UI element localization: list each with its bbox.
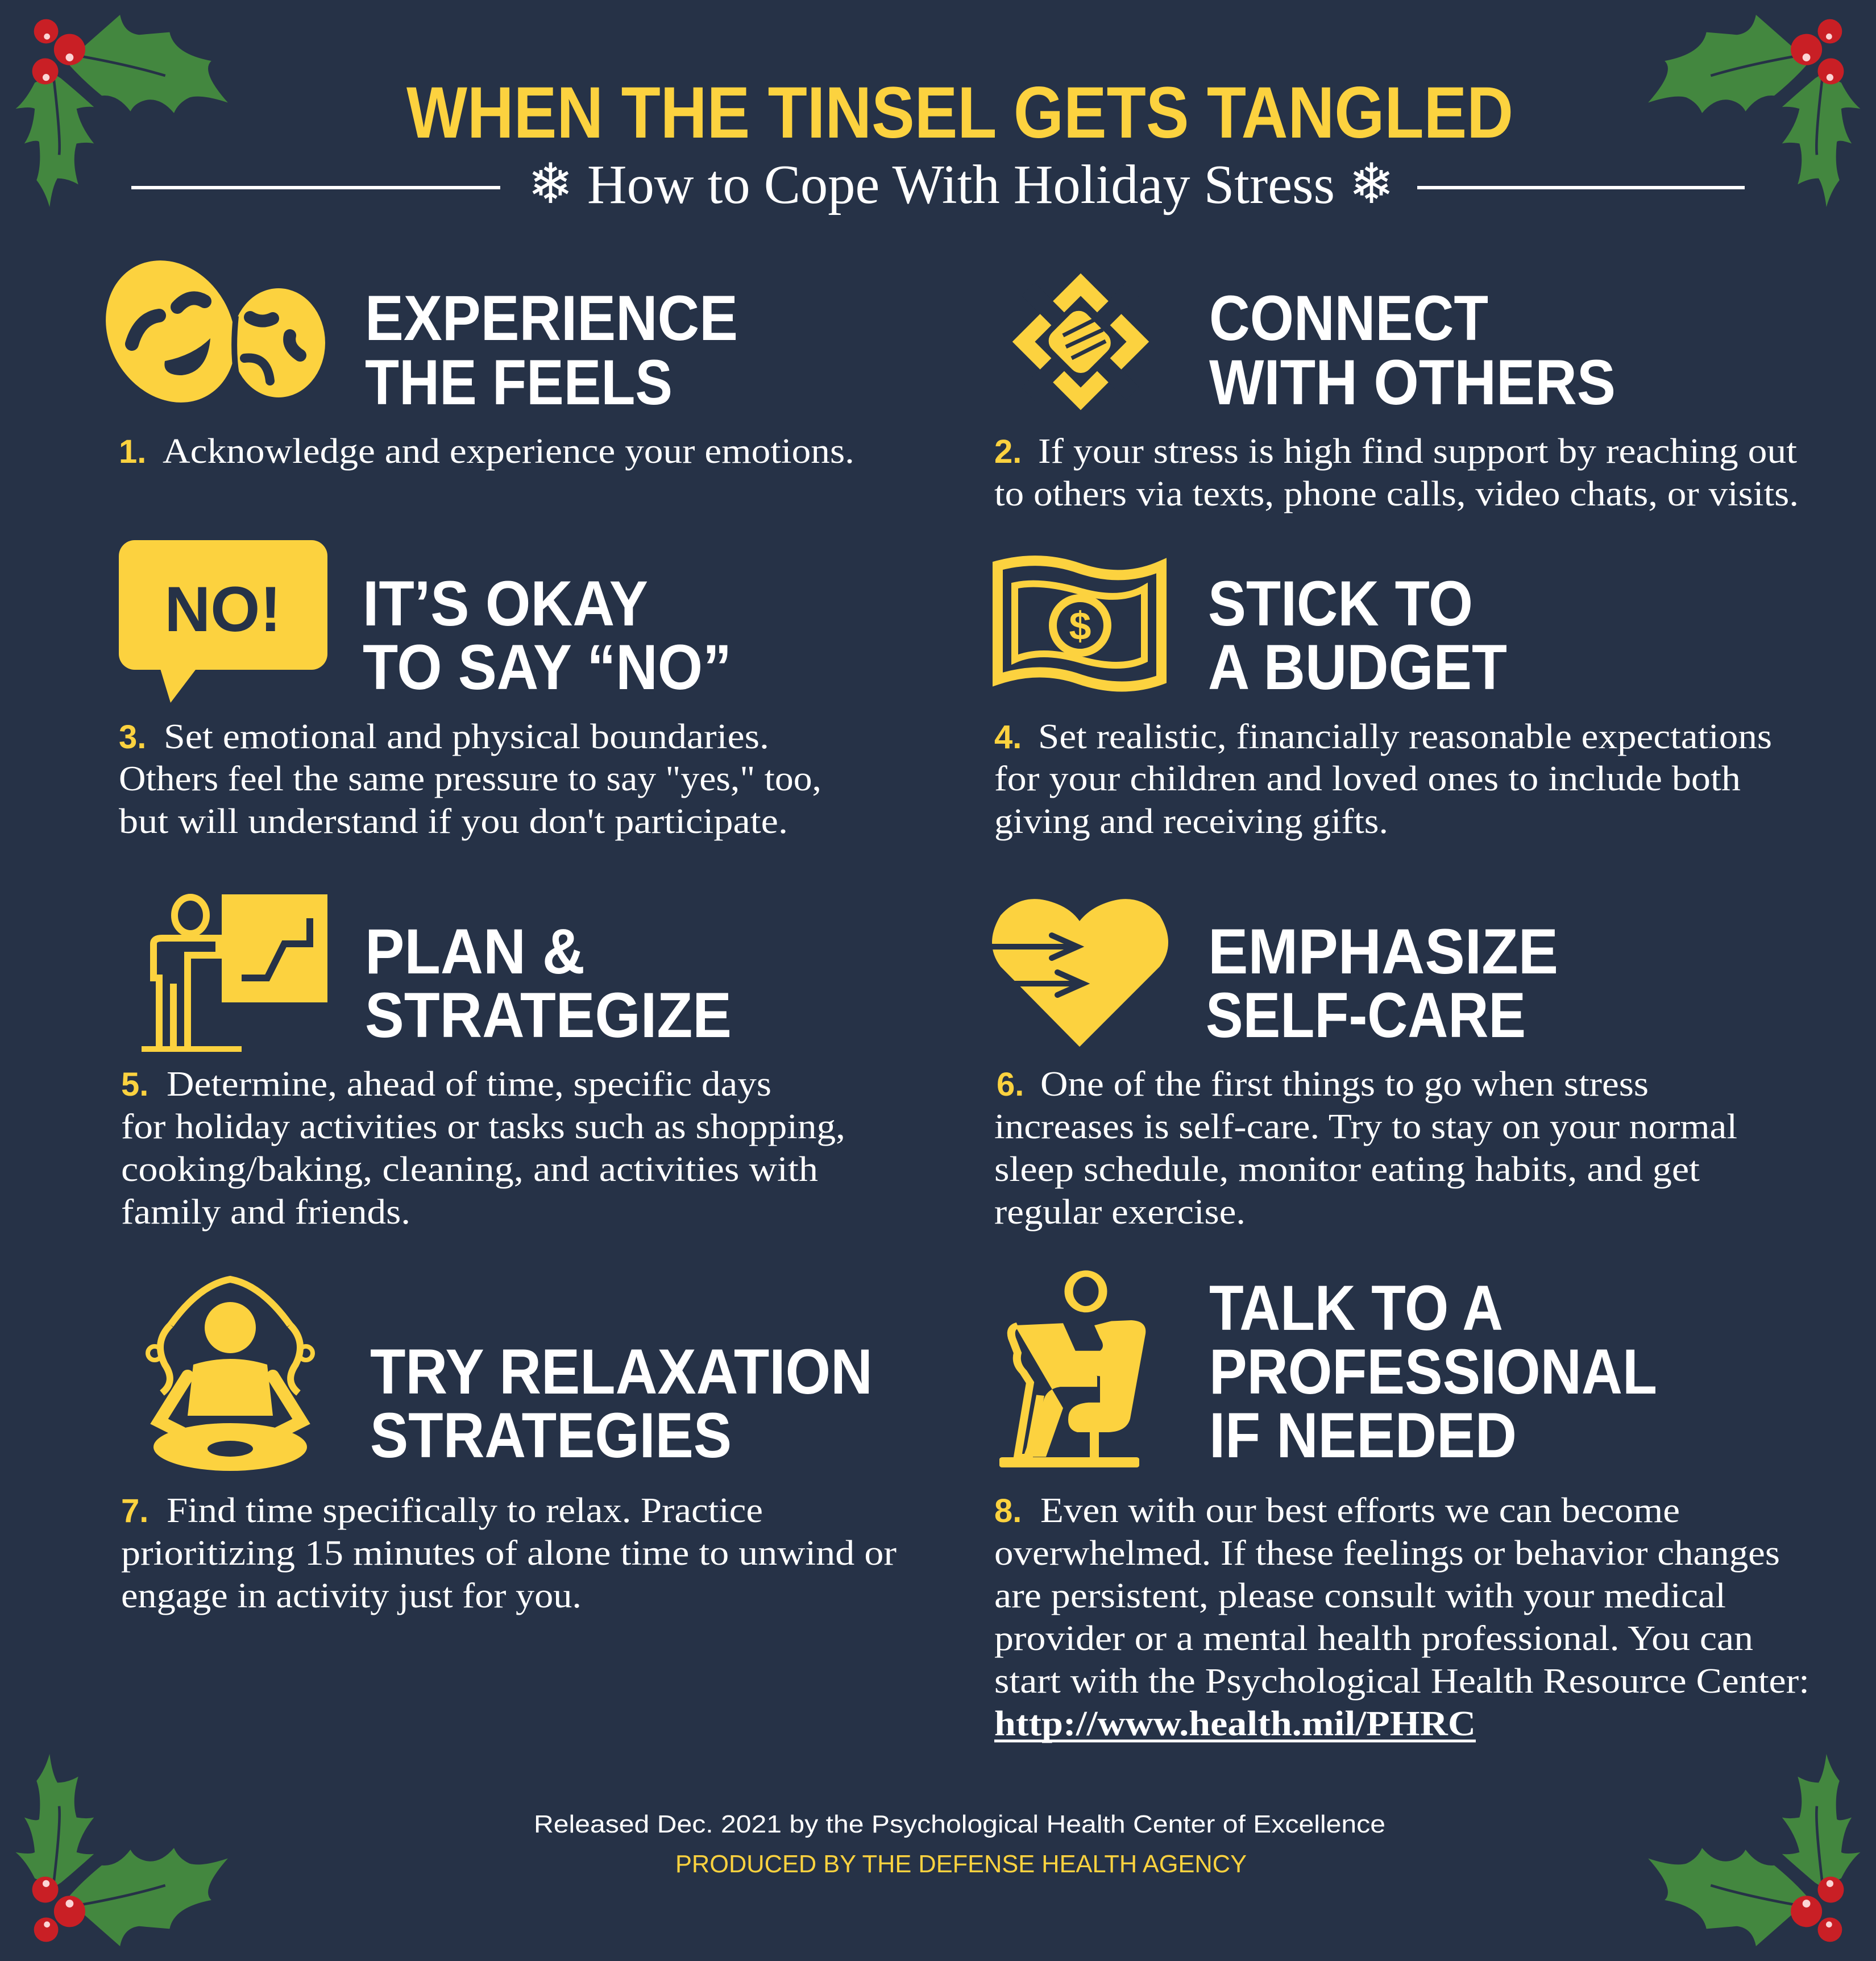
panel: connect with others: [994, 283, 1799, 513]
heading: IT’S OKAY: [363, 568, 648, 639]
footer: [534, 1810, 1385, 1878]
text block: 6.: [997, 1066, 1024, 1103]
text block: for holiday activities or tasks such as shopping,: [121, 1108, 845, 1146]
title: WHEN THE TINSEL GETS TANGLED: [406, 72, 1513, 154]
text block: [121, 1065, 845, 1232]
icon: NO speech bubble: [119, 540, 327, 703]
text block: to others via texts, phone calls, video chats, or visits.: [994, 475, 1799, 513]
text block: 3.: [119, 719, 146, 756]
text block: 5.: [121, 1066, 148, 1103]
text block: sleep schedule, monitor eating habits, and get: [994, 1150, 1700, 1189]
holly: top-right: [1648, 15, 1860, 207]
icon: NO speech bubble: NO!: [164, 574, 281, 645]
panel: okay to say no: [119, 540, 821, 841]
heading: THE FEELS: [365, 347, 673, 418]
heading: SELF-CARE: [1206, 980, 1526, 1051]
panel: plan and strategize: [121, 894, 845, 1232]
panel: experience the feels: [80, 237, 854, 471]
heading: TO SAY “NO”: [363, 632, 732, 703]
text block: provider or a mental health professional. You can: [994, 1619, 1753, 1658]
text block: but will understand if you don't participate.: [119, 802, 788, 841]
text block: Even with our best efforts we can become: [1040, 1491, 1680, 1530]
icon: theater masks: [80, 237, 325, 426]
text block: Determine, ahead of time, specific days: [167, 1065, 771, 1104]
icon: heart hug: [989, 899, 1168, 1047]
text block: Find time specifically to relax. Practice: [167, 1491, 763, 1530]
heading: WITH OTHERS: [1209, 347, 1616, 418]
text block: 1.: [119, 433, 146, 470]
panel: talk to a professional: [994, 1272, 1809, 1743]
heading: TALK TO A: [1209, 1272, 1503, 1344]
heading: [370, 1336, 873, 1471]
heading: [365, 283, 738, 418]
text block: Acknowledge and experience your emotions.: [163, 432, 854, 471]
icon: presenter with board: [142, 894, 327, 1049]
heading: EXPERIENCE: [365, 283, 738, 354]
icon: money bill: $: [1069, 604, 1091, 648]
text block: 4.: [994, 719, 1022, 756]
heading: A BUDGET: [1208, 632, 1507, 703]
icon: money bill: [998, 561, 1161, 687]
text block: [994, 432, 1799, 513]
icon: person in chair: [999, 1274, 1145, 1467]
text block: [994, 1491, 1809, 1743]
heading: [1209, 1272, 1657, 1471]
text block: One of the first things to go when stress: [1040, 1065, 1649, 1104]
text block: 7.: [121, 1492, 148, 1529]
text block: are persistent, please consult with your medical: [994, 1577, 1726, 1615]
text block: increases is self-care. Try to stay on your normal: [994, 1108, 1737, 1146]
text block: If your stress is high find support by reaching out: [1038, 432, 1797, 471]
footer: Released Dec. 2021 by the Psychological Health Center of Excellence: [534, 1810, 1385, 1838]
heading: IF NEEDED: [1209, 1400, 1517, 1471]
text block: prioritizing 15 minutes of alone time to unwind or: [121, 1534, 897, 1573]
heading: [1206, 916, 1558, 1051]
heading: TRY RELAXATION: [370, 1336, 873, 1407]
text block: [994, 718, 1772, 841]
text block: Others feel the same pressure to say "yes," too,: [119, 760, 821, 798]
icon: hands: [1022, 283, 1139, 401]
heading: STRATEGIES: [370, 1400, 732, 1471]
text block: 8.: [994, 1492, 1022, 1529]
heading: PROFESSIONAL: [1209, 1336, 1657, 1407]
text block: engage in activity just for you.: [121, 1577, 582, 1615]
text block: [121, 1491, 897, 1615]
text block: start with the Psychological Health Resource Center:: [994, 1662, 1809, 1701]
heading: STICK TO: [1208, 568, 1473, 639]
text block: [119, 718, 821, 841]
text block: [994, 1065, 1737, 1232]
panel: stick to a budget: [994, 561, 1772, 841]
text block: http://www.health.mil/PHRC: [994, 1705, 1476, 1743]
text block: family and friends.: [121, 1193, 410, 1232]
heading: [1209, 283, 1616, 418]
holly: bottom-right: [1648, 1754, 1860, 1946]
heading: CONNECT: [1209, 283, 1488, 354]
panel: emphasize self-care: [989, 899, 1737, 1232]
text block: giving and receiving gifts.: [994, 802, 1388, 841]
heading: PLAN &: [365, 916, 585, 987]
text block: overwhelmed. If these feelings or behavior changes: [994, 1534, 1780, 1573]
text block: 2.: [994, 433, 1022, 470]
heading: [1208, 568, 1507, 703]
heading: [365, 916, 732, 1051]
footer: PRODUCED BY THE DEFENSE HEALTH AGENCY: [675, 1850, 1247, 1878]
text block: regular exercise.: [994, 1193, 1246, 1232]
icon: meditating figure: [148, 1279, 313, 1471]
text block: for your children and loved ones to include both: [994, 760, 1741, 798]
text block: cooking/baking, cleaning, and activities with: [121, 1150, 818, 1189]
subtitle: ❄ How to Cope With Holiday Stress ❄: [528, 154, 1394, 215]
panel: try relaxation strategies: [121, 1279, 897, 1615]
holly: top-left: [16, 15, 228, 207]
text block: Set emotional and physical boundaries.: [164, 718, 769, 756]
heading: EMPHASIZE: [1208, 916, 1558, 987]
holly: bottom-left: [16, 1754, 228, 1946]
heading: STRATEGIZE: [365, 980, 732, 1051]
heading: [363, 568, 732, 703]
text block: Set realistic, financially reasonable expectations: [1038, 718, 1772, 756]
